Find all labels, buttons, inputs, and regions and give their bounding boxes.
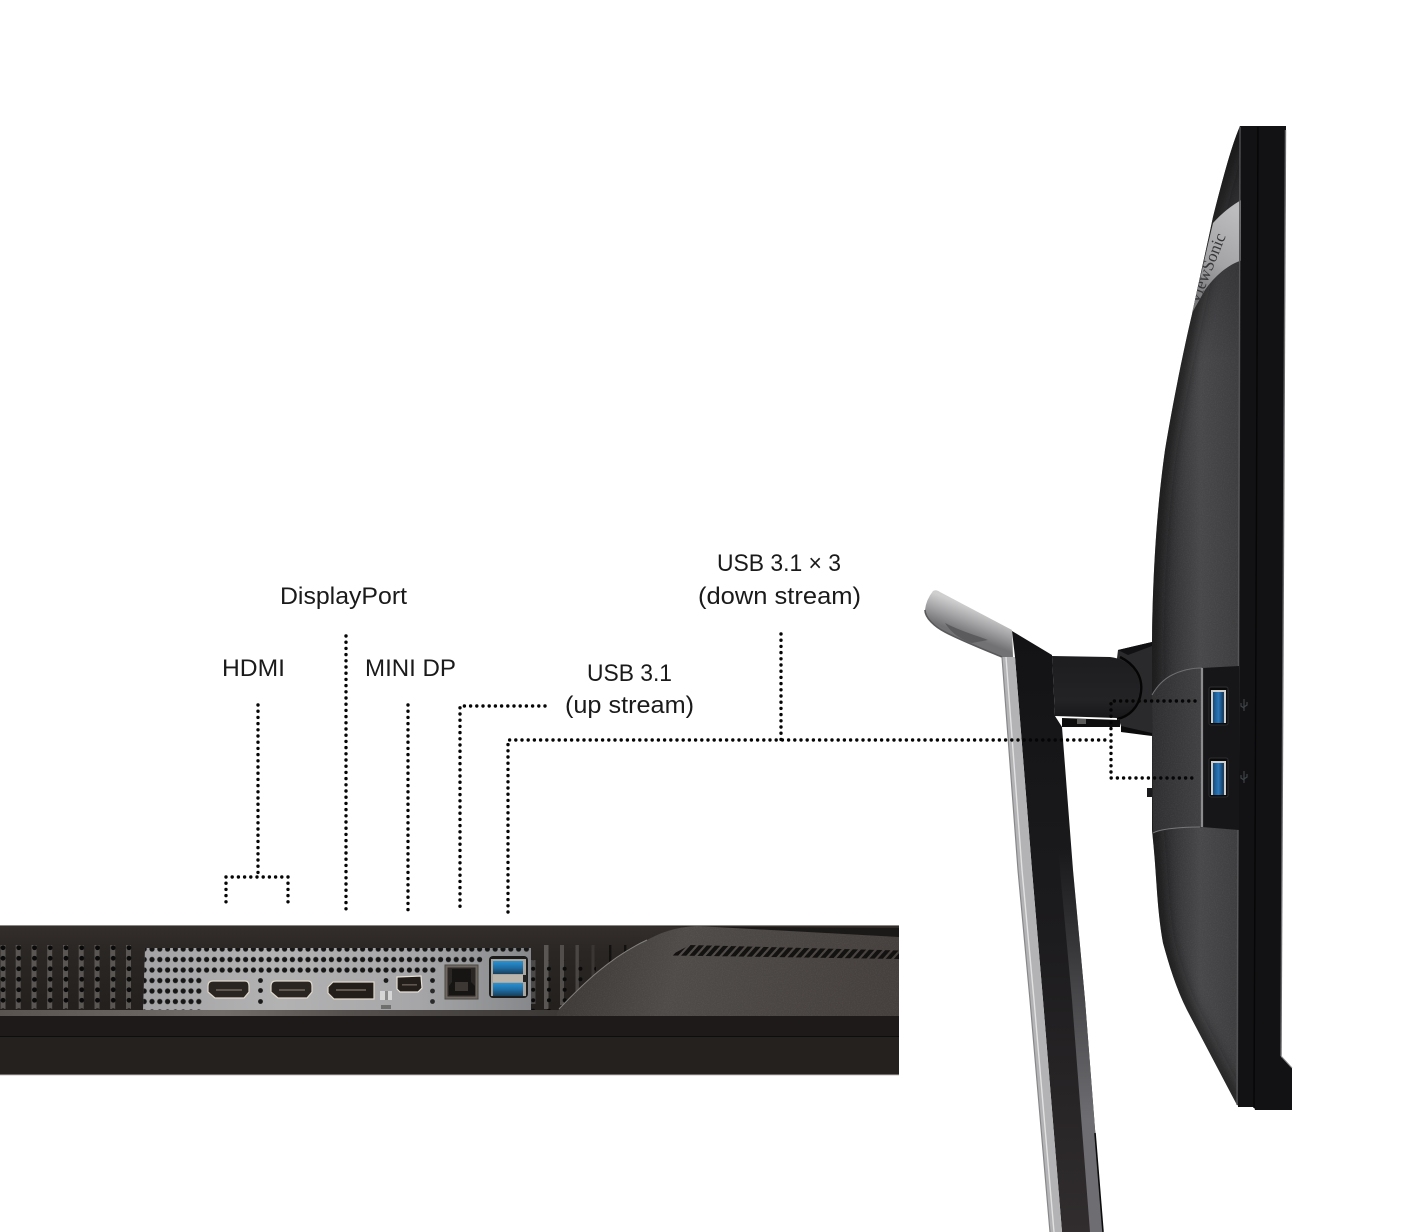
back cover shell with air slits [556,926,899,1016]
small side button [1147,788,1152,797]
leader line: USB up stream [460,706,545,912]
USB port side 1 [1209,687,1228,725]
port: HDMI 2 [271,981,312,998]
label: DisplayPort: DisplayPort [280,583,407,610]
leader line: Mini DP [406,705,410,912]
port: USB-B upstream [445,965,478,999]
back cover [1152,126,1243,1107]
label: HDMI: HDMI [222,655,285,682]
label: USB 3.1 x 3 down stream: USB 3.1 × 3 [717,550,841,577]
panel: monitor rear ports close-up [0,925,899,1075]
body bands [0,925,899,1075]
port: DisplayPort [328,982,374,999]
USB hub recess [1202,666,1239,830]
stand handle [925,590,1013,657]
label: USB 3.1 up stream: USB 3.1 [587,660,672,687]
label: USB 3.1 up stream: (up stream) [565,692,694,719]
silver connector plate [0,948,560,1016]
label: USB 3.1 x 3 down stream: (down stream) [698,583,861,610]
port: HDMI 1 [208,981,249,998]
icon: USB symbol 1 [1241,699,1247,711]
leader line: USB down stream [508,634,1108,912]
right vent grille [528,945,626,1010]
label: MINI DP: MINI DP [365,655,456,682]
leader line: DisplayPort [344,636,348,912]
front panel bezel [1237,126,1292,1110]
silver logo band [1192,200,1241,312]
left vent grille [0,945,134,1009]
leader line: side USB ports [1111,701,1195,778]
stand pivot arm [1052,656,1141,727]
leader line: HDMI [226,705,288,907]
stand hinge bracket [1112,642,1152,736]
icon: USB symbol 2 [1241,771,1247,783]
USB port side 2 [1209,758,1228,797]
ViewSonic logo: ViewSonic [1184,230,1230,307]
monitor side view with stand [925,126,1292,1232]
stand column [1002,631,1103,1232]
port: USB-A double stack [489,956,528,998]
center cover section around USB hub [1152,668,1202,833]
port: Mini DisplayPort [397,976,422,992]
